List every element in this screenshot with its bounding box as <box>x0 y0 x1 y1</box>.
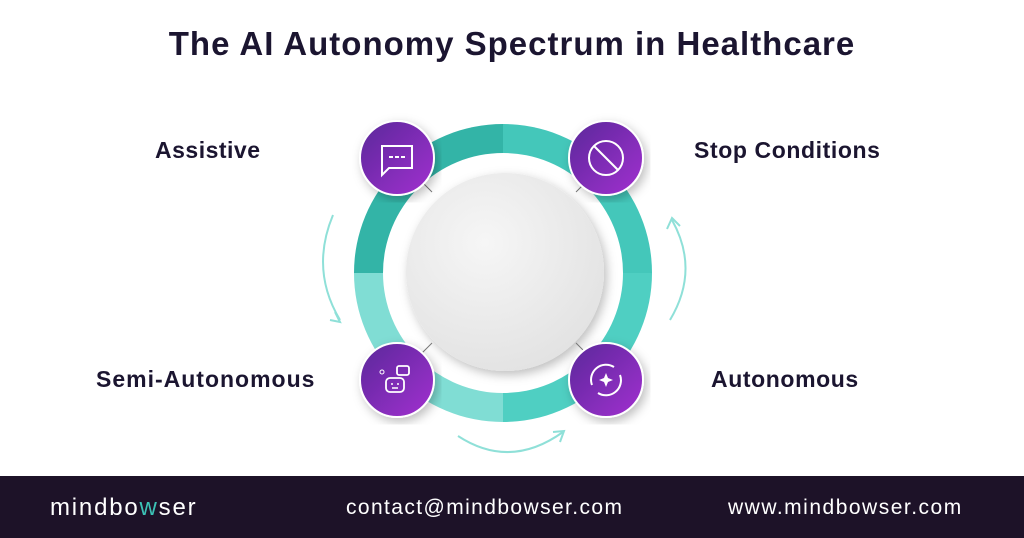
icon: robot <box>360 343 434 417</box>
ring <box>354 124 652 422</box>
icon: chat <box>360 121 434 195</box>
logo: mindbowser <box>50 494 197 521</box>
center disc <box>406 173 604 371</box>
label: Autonomous: Autonomous <box>711 366 859 392</box>
title: The AI Autonomy Spectrum in Healthcare <box>169 25 855 62</box>
footer <box>0 476 1024 538</box>
contact email: contact@mindbowser.com <box>346 496 623 519</box>
label: Stop Conditions: Stop Conditions <box>694 137 881 163</box>
label: Semi-Autonomous: Semi-Autonomous <box>96 366 315 392</box>
label: Assistive: Assistive <box>155 137 261 163</box>
arrows <box>323 215 686 452</box>
icon: cycle <box>569 343 643 417</box>
website: www.mindbowser.com <box>728 496 963 519</box>
icon: stop <box>569 121 643 195</box>
